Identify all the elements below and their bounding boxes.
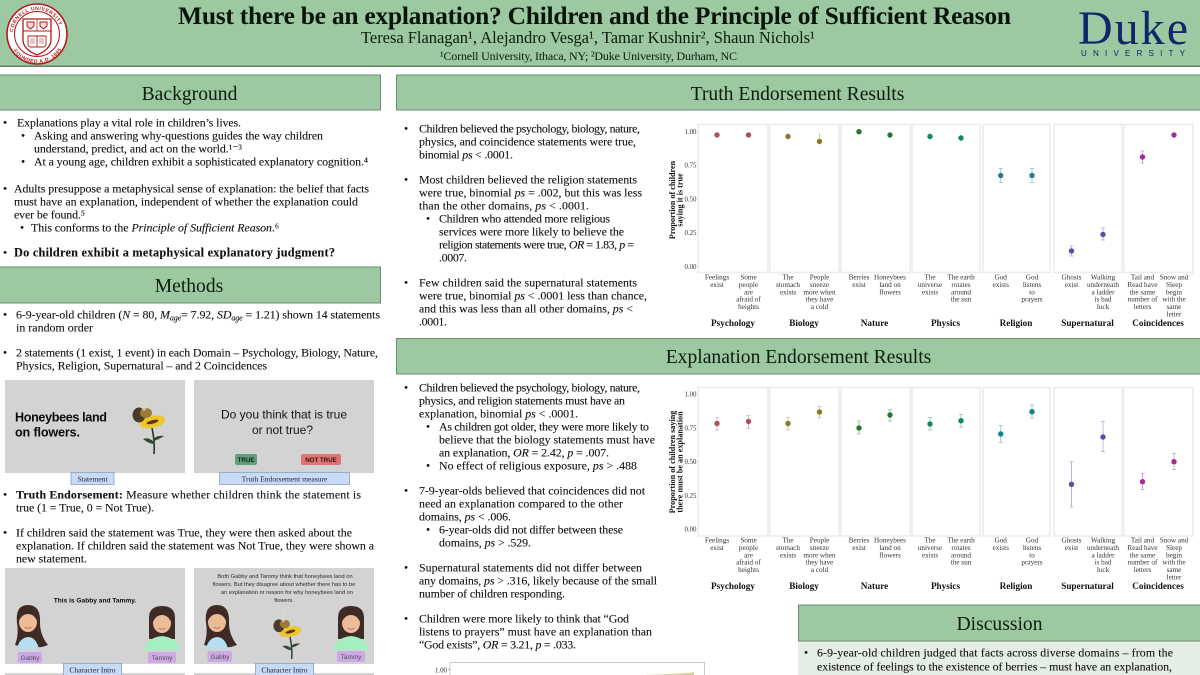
x-axis statement labels: they have <box>806 559 833 567</box>
x-axis statement labels: letter <box>1167 573 1182 581</box>
panel: disagreement slide: flowers. <box>274 598 294 604</box>
text block: explanation results: Children were more likely to think that “God <box>419 612 629 626</box>
x-axis statement labels: the sun <box>951 559 972 567</box>
text block: truth results: were true, binomial ps = .002, but this was less <box>419 186 642 200</box>
y-axis title: Proportion of children saying <box>668 410 677 513</box>
text block: explanation results: number of children responding. <box>419 586 565 600</box>
text block: background: understand, predict, and act on the world.¹⁻³ <box>34 142 242 156</box>
text block: explanation results: 6-year-olds did not differ between these <box>439 522 623 536</box>
x-axis statement labels: land on <box>879 281 901 289</box>
chart: God statements plot, cropped at the page edge <box>435 662 704 675</box>
text block: explanation results: domains, ps > .529. <box>439 536 531 550</box>
caption: character intro left: Character Intro <box>69 666 116 674</box>
domain labels: Biology <box>789 581 819 591</box>
y-axis ticks: 0.50 <box>684 196 697 204</box>
x-axis statement labels: Tail and <box>1131 274 1155 282</box>
chart: explanation endorsement dot plot <box>668 388 1193 591</box>
text block: background <box>3 116 369 260</box>
text block: methods participants <box>3 308 380 372</box>
panel: disagreement slide: Tammy <box>341 654 362 661</box>
text block: truth results: .0001. <box>419 314 447 328</box>
x-axis statement labels: The earth <box>947 536 975 544</box>
x-axis statement labels: same <box>1167 303 1181 311</box>
text block: background: must have an explanation, independent of whether the explanation could <box>14 194 358 208</box>
icon: Cornell University seal: FOUNDED A.D. 1865 <box>14 48 61 63</box>
x-axis statement labels: luck <box>1097 566 1110 574</box>
x-axis statement labels: begin <box>1166 551 1182 559</box>
text block: truth results: than the other domains, ps < .0001. <box>419 198 589 212</box>
authors: Teresa Flanagan¹, Alejandro Vesga¹, Tamar Kushnir², Shaun Nichols¹ <box>361 28 815 47</box>
y-axis ticks: 0.50 <box>684 459 697 466</box>
text block: methods participants: • <box>3 308 7 322</box>
panel: truth endorsement slide: or not true? <box>252 423 313 437</box>
x-axis statement labels: Snow and <box>1160 536 1189 544</box>
text block: truth results: were true, binomial ps < .0001 less than chance, <box>419 288 647 302</box>
text block: methods participants: age <box>170 314 182 322</box>
x-axis statement labels: exists <box>993 281 1009 289</box>
text block: explanation results: explanation, binomial ps < .0001. <box>419 406 578 420</box>
x-axis statement labels: universe <box>918 281 942 289</box>
panel: statement slide: Honeybees land <box>15 410 107 424</box>
text block: background: • <box>21 128 25 142</box>
x-axis statement labels: rotates <box>951 281 971 289</box>
points <box>714 405 1177 507</box>
x-axis statement labels: The <box>782 274 794 282</box>
heading: Discussion: Discussion <box>956 614 1043 635</box>
caption: statement: Statement <box>77 474 109 484</box>
text block: background: • <box>3 246 7 260</box>
text block: truth endorsement procedure: • <box>3 526 7 540</box>
x-axis statement labels: around <box>951 288 971 296</box>
x-axis statement labels: Ghosts <box>1062 536 1082 544</box>
x-axis statement labels: God <box>995 274 1007 282</box>
x-axis statement labels: with the <box>1162 559 1186 567</box>
x-axis statement labels: heights <box>738 303 759 311</box>
x-axis statement labels: Sleep <box>1166 281 1182 289</box>
x-axis statement labels: is bad <box>1095 296 1112 304</box>
text block: truth results: • <box>426 212 430 226</box>
text block: truth results <box>404 122 647 328</box>
x-axis statement labels: more when <box>803 288 836 296</box>
x-axis statement labels: listens <box>1023 544 1041 552</box>
y-axis title: there must be an explanation <box>676 411 684 513</box>
domain labels: Religion <box>1000 581 1032 591</box>
heading: Methods <box>0 267 380 303</box>
domain labels <box>711 318 1184 328</box>
text block: explanation results: an explanation, OR = 2.42, p = .007. <box>439 446 609 460</box>
domain labels: Psychology <box>711 318 755 328</box>
x-axis statement labels: letters <box>1134 303 1151 311</box>
x-axis statement labels: more when <box>803 551 836 559</box>
x-axis statement labels: Read have <box>1127 544 1158 552</box>
text block: methods participants: = 7.92, <box>181 308 217 322</box>
x-axis statement labels: exists <box>780 551 796 559</box>
y-axis ticks: 0.00 <box>684 527 697 534</box>
domain labels: Supernatural <box>1061 318 1114 328</box>
x-axis statement labels: Ghosts <box>1062 274 1082 282</box>
text block: truth endorsement procedure: • <box>3 488 7 502</box>
x-axis statement labels: God <box>995 536 1007 544</box>
discussion text: • <box>804 646 808 660</box>
heading: Explanation Endorsement Results: Explanation Endorsement Results <box>666 347 931 368</box>
text block: explanation results: listens to prayers” must have an explanation than <box>419 624 652 638</box>
x-axis statement labels: number of <box>1128 559 1158 567</box>
domain labels: Coincidences <box>1132 318 1184 328</box>
text block: background: • <box>20 220 24 234</box>
text block: truth endorsement procedure: explanation. If children said the statement was Not True, they were shown a <box>16 538 375 552</box>
x-axis statement labels: exist <box>852 281 866 289</box>
x-axis statement labels: land on <box>879 544 901 552</box>
text block: explanation results <box>404 380 658 652</box>
x-axis statement labels: Walking <box>1091 274 1115 282</box>
text block: background: Adults presuppose a metaphysical sense of explanation: the belief that facts <box>14 182 369 196</box>
discussion text <box>804 646 1173 674</box>
text block: explanation results: • <box>426 458 430 472</box>
text block: truth endorsement procedure: If children said the statement was True, they were then asked about the <box>16 526 352 540</box>
x-axis statement labels: a ladder <box>1092 551 1115 559</box>
x-axis statement labels: rotates <box>951 544 971 552</box>
text block: background: Do children exhibit a metaphysical explanatory judgment? <box>14 246 335 260</box>
heading: Background: Background <box>142 84 238 105</box>
x-axis statement labels: exist <box>710 281 724 289</box>
caption: character intro left <box>64 664 122 675</box>
panel: statement slide <box>5 380 185 473</box>
x-axis statement labels: prayers <box>1021 296 1043 304</box>
text block: background: This conforms to the Principle of Sufficient Reason.⁶ <box>31 220 279 234</box>
caption: truth endorsement measure: Truth Endorsement measure <box>242 474 328 484</box>
icon: Duke University logo: UNIVERSITY <box>1081 49 1186 58</box>
x-axis statement labels: the same <box>1130 288 1155 296</box>
x-axis statement labels: sneeze <box>810 281 829 289</box>
text block: truth results: and this was less than all other domains, ps < <box>419 302 633 316</box>
y-axis ticks: 0.25 <box>684 230 697 237</box>
x-axis statement labels: a ladder <box>1092 288 1115 296</box>
x-axis statement labels: The <box>924 274 936 282</box>
x-axis statement labels: are <box>744 288 753 296</box>
domain labels: Religion <box>1000 318 1032 328</box>
x-axis statement labels: people <box>739 544 758 552</box>
x-axis statement labels: Read have <box>1127 281 1158 289</box>
x-axis statement labels: to <box>1029 551 1035 559</box>
text block: explanation results: No effect of religious exposure, ps > .488 <box>439 458 637 472</box>
affiliations: ¹Cornell University, Ithaca, NY; ²Duke University, Durham, NC <box>440 49 737 63</box>
x-axis statement labels: God <box>1026 274 1039 282</box>
text block: background: • <box>3 182 7 196</box>
panel: disagreement slide: an explanation or reason for why honeybees land on <box>221 590 353 596</box>
panel: truth endorsement slide <box>194 380 374 473</box>
y-axis ticks: 0.75 <box>684 425 697 432</box>
chart: truth endorsement dot plot <box>668 124 1193 328</box>
text block: explanation results: 7-9-year-olds believed that coincidences did not <box>419 484 646 498</box>
panel: character intro slide: Gabby <box>21 655 40 662</box>
text block: truth results: • <box>404 172 408 186</box>
text block: truth results: Few children said the supernatural statements <box>419 276 637 290</box>
text block: methods participants: = 1.21) shown 14 statements <box>243 308 380 322</box>
discussion text: existence of feelings to the existence of berries – must have an explanation, <box>817 660 1172 674</box>
panels <box>698 388 1193 536</box>
y-axis ticks: 0.25 <box>684 493 697 500</box>
x-axis statement labels: sneeze <box>810 544 829 552</box>
x-axis statement labels: exist <box>852 544 866 552</box>
x-axis statement labels: Honeybees <box>874 536 906 544</box>
text block: explanation results: • <box>404 380 408 394</box>
text block: methods participants: 2 statements (1 exist, 1 event) in each Domain – Psychology, Biology, Nature, <box>16 346 378 360</box>
text block: explanation results: As children got older, they were more likely to <box>439 420 649 434</box>
x-axis statement labels: Feelings <box>705 274 729 282</box>
y-axis ticks: 0.00 <box>684 264 697 271</box>
header band <box>0 0 1200 67</box>
heading: Truth Endorsement Results: Truth Endorsement Results <box>691 84 904 105</box>
x-axis statement labels: People <box>810 536 829 544</box>
x-axis statement labels: exist <box>1065 281 1078 289</box>
y-axis title: saying it is true <box>676 173 684 227</box>
x-axis statement labels: they have <box>806 296 833 304</box>
x-axis statement labels: underneath <box>1087 281 1119 289</box>
heading: Background <box>0 75 380 110</box>
x-axis statement labels: Berries <box>849 274 870 282</box>
y-axis title <box>668 410 684 513</box>
panel: next slides cropped at the edge <box>5 673 374 675</box>
panel: character intro slide: Tammy <box>152 655 173 662</box>
text block: explanation results: • <box>426 522 430 536</box>
x-axis statement labels: are <box>744 551 753 559</box>
y-axis ticks: 0.75 <box>684 163 697 170</box>
y-axis ticks <box>684 129 697 271</box>
x-axis statement labels: Sleep <box>1166 544 1182 552</box>
x-axis statement labels: flowers <box>879 551 901 559</box>
caption: character intro right <box>256 664 314 675</box>
domain labels: Supernatural <box>1061 581 1114 591</box>
text block: methods participants: SD <box>217 308 232 322</box>
text block: truth endorsement procedure: Truth Endorsement: Measure whether children think the statement is <box>16 488 361 502</box>
text block: explanation results: Supernatural statements did not differ between <box>419 560 642 574</box>
text block: methods participants: Physics, Religion, Supernatural – and 2 Coincidences <box>16 358 267 372</box>
text block: explanation results: “God exists”, OR = 3.21, p = .033. <box>419 638 576 652</box>
text block: truth results: Most children believed the religion statements <box>419 172 637 186</box>
panel: disagreement slide: Both Gabby and Tammy think that honeybees land on <box>217 574 353 580</box>
y-axis ticks <box>684 392 697 534</box>
text block: explanation results: • <box>404 484 408 498</box>
x-axis statement labels: Snow and <box>1160 274 1189 282</box>
text block: methods participants: in random order <box>16 320 93 334</box>
text block: truth results: Children believed the psychology, biology, nature, <box>419 122 640 136</box>
text block: explanation results: need an explanation compared to the other <box>419 496 623 510</box>
text block: truth results: services were more likely to believe the <box>439 224 624 238</box>
caption: character intro right: Character Intro <box>261 666 308 674</box>
heading: Truth Endorsement Results <box>396 75 1200 110</box>
domain labels: Psychology <box>711 581 755 591</box>
discussion text: 6-9-year-old children judged that facts across diverse domains – from the <box>817 646 1173 660</box>
x-axis statement labels: Walking <box>1091 536 1115 544</box>
x-axis statement labels: Honeybees <box>874 274 906 282</box>
x-axis statement labels: exists <box>780 288 796 296</box>
x-axis statement labels: exist <box>1065 544 1078 552</box>
domain labels: Nature <box>861 318 888 328</box>
text block: methods participants: age <box>231 314 243 322</box>
text block: truth results: religion statements were true, OR = 1.83, p = <box>439 238 634 252</box>
x-axis statement labels: Some <box>740 274 757 282</box>
text block: explanation results: domains, ps < .006. <box>419 510 511 524</box>
text block: truth endorsement procedure <box>3 488 375 566</box>
x-axis statement labels <box>705 274 1189 318</box>
domain labels: Biology <box>789 318 819 328</box>
panel: character intro slide <box>5 568 185 664</box>
domain labels: Coincidences <box>1132 581 1184 591</box>
x-axis statement labels: exists <box>922 551 938 559</box>
panel: statement slide: on flowers. <box>15 426 80 440</box>
x-axis statement labels: afraid of <box>736 296 761 304</box>
x-axis statement labels: a cold <box>811 566 829 574</box>
x-axis statement labels: the same <box>1130 551 1155 559</box>
text block: truth results: physics, and coincidence statements were true, <box>419 134 636 148</box>
x-axis statement labels: listens <box>1023 281 1041 289</box>
text block: explanation results: Children believed the psychology, biology, nature, <box>419 380 640 394</box>
panel: Discussion <box>798 605 1200 675</box>
x-axis statement labels: luck <box>1097 303 1110 311</box>
domain labels: Nature <box>861 581 888 591</box>
text block: background: Explanations play a vital role in children’s lives. <box>17 116 241 130</box>
text block: explanation results: any domains, ps > .316, likely because of the small <box>419 574 658 588</box>
x-axis statement labels <box>705 536 1189 581</box>
x-axis statement labels: God <box>1026 536 1039 544</box>
x-axis statement labels: stomach <box>776 544 800 552</box>
caption: truth endorsement measure <box>220 472 350 484</box>
text block: explanation results: believe that the biology statements must have <box>439 432 655 446</box>
x-axis statement labels: The <box>782 536 794 544</box>
x-axis statement labels: universe <box>918 544 942 552</box>
panel: disagreement slide <box>194 568 374 664</box>
x-axis statement labels: heights <box>738 566 759 574</box>
x-axis statement labels: begin <box>1166 288 1182 296</box>
text block: background: • <box>21 154 25 168</box>
x-axis statement labels: same <box>1167 566 1181 574</box>
caption: statement <box>71 472 114 484</box>
text block: methods participants: 6-9-year-old children (N = 80, M <box>16 308 170 322</box>
y-axis ticks: 1.00 <box>684 392 697 398</box>
panel: truth endorsement slide: TRUE <box>238 457 254 464</box>
panel: truth endorsement slide: NOT TRUE <box>305 457 337 464</box>
panel: truth endorsement slide: Do you think that is true <box>221 408 347 422</box>
x-axis statement labels: Tail and <box>1131 536 1155 544</box>
text block: truth endorsement procedure: true (1 = True, 0 = Not True). <box>16 500 154 514</box>
panel: disagreement slide: flowers. But they disagree about whether there has to be <box>213 582 355 588</box>
x-axis statement labels: exist <box>710 544 724 552</box>
x-axis statement labels: people <box>739 281 758 289</box>
x-axis statement labels: a cold <box>811 303 829 311</box>
title: Must there be an explanation? Children and the Principle of Sufficient Reason <box>178 1 1011 30</box>
heading: Discussion <box>798 605 1200 641</box>
points <box>714 129 1177 256</box>
icon: Cornell University seal <box>6 3 68 65</box>
text block: truth results: .0007. <box>439 250 467 264</box>
x-axis statement labels: underneath <box>1087 544 1119 552</box>
text block: truth endorsement procedure: new statement. <box>16 552 87 566</box>
x-axis statement labels: the sun <box>951 296 972 304</box>
x-axis statement labels: stomach <box>776 281 800 289</box>
icon: Duke University logo: Duke <box>1078 2 1188 55</box>
text block: truth results: binomial ps < .0001. <box>419 148 513 162</box>
text block: explanation results: • <box>404 560 408 574</box>
text block: truth results: • <box>404 122 408 136</box>
x-axis statement labels: letter <box>1167 310 1182 318</box>
x-axis statement labels: with the <box>1162 296 1186 304</box>
y-axis title <box>668 160 684 239</box>
heading: Methods: Methods <box>155 276 223 297</box>
x-axis statement labels: The <box>924 536 936 544</box>
x-axis statement labels: is bad <box>1095 559 1112 567</box>
heading: Explanation Endorsement Results <box>396 338 1200 374</box>
text block: background: • <box>3 116 7 130</box>
x-axis statement labels: The earth <box>947 274 975 282</box>
panels <box>698 124 1193 272</box>
x-axis statement labels: Berries <box>849 536 870 544</box>
x-axis statement labels: number of <box>1128 296 1158 304</box>
text block: truth results: Children who attended more religious <box>439 212 610 226</box>
x-axis statement labels: letters <box>1134 566 1151 574</box>
domain labels: Physics <box>931 581 960 591</box>
x-axis statement labels: to <box>1029 288 1035 296</box>
text block: explanation results: • <box>426 420 430 434</box>
domain labels <box>711 581 1184 591</box>
x-axis statement labels: exists <box>993 544 1009 552</box>
x-axis statement labels: Some <box>740 536 757 544</box>
text block: background: At a young age, children exhibit a sophisticated explanatory cognition.⁴ <box>34 154 368 168</box>
text block: explanation results: physics, and religion statements must have an <box>419 394 625 408</box>
y-axis ticks: 1.00 <box>684 129 697 136</box>
y-axis title: Proportion of children <box>668 160 677 239</box>
text block: methods participants: • <box>3 346 7 360</box>
x-axis statement labels: People <box>810 274 829 282</box>
panel: disagreement slide: Gabby <box>211 654 230 661</box>
x-axis statement labels: around <box>951 551 971 559</box>
x-axis statement labels: prayers <box>1021 559 1043 567</box>
x-axis statement labels: Feelings <box>705 536 729 544</box>
chart: God statements plot, cropped at the page edge: 1.00 <box>435 668 448 674</box>
text block: truth results: • <box>404 276 408 290</box>
x-axis statement labels: afraid of <box>736 559 761 567</box>
text block: background: Asking and answering why-questions guides the way children <box>34 128 323 142</box>
x-axis statement labels: flowers <box>879 288 901 296</box>
panel: character intro slide: This is Gabby and Tammy. <box>54 598 136 604</box>
text block: background: ever be found.⁵ <box>14 208 85 222</box>
x-axis statement labels: exists <box>922 288 938 296</box>
icon: Cornell University seal: CORNELL UNIVERSITY <box>10 6 62 32</box>
domain labels: Physics <box>931 318 960 328</box>
text block: explanation results: • <box>404 612 408 626</box>
